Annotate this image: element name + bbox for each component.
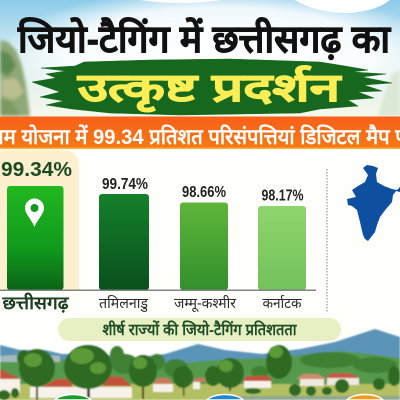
forested hill left xyxy=(0,40,30,116)
bottom circle: blue xyxy=(207,395,243,400)
mountains xyxy=(0,328,400,364)
bar: Chhattisgarh: 99.34% xyxy=(1,159,72,181)
haze band xyxy=(0,354,60,362)
bar: Tamil Nadu: 99.74% xyxy=(102,176,148,193)
highlighted heading on green brush stroke xyxy=(32,59,392,115)
header background: sky and clouds xyxy=(0,0,400,118)
landscape illustration xyxy=(0,329,400,400)
far tree line xyxy=(0,351,400,386)
label: Tamil Nadu: तमिलनाडु xyxy=(99,295,148,312)
houses xyxy=(0,369,360,398)
bar: Tamil Nadu xyxy=(99,176,149,290)
ground xyxy=(0,384,400,400)
back trees xyxy=(110,346,397,378)
bottom circle: green xyxy=(55,395,91,400)
bar chart xyxy=(0,150,316,313)
caption pill xyxy=(58,318,341,341)
bar: Jammu-Kashmir xyxy=(180,184,228,290)
highlighted heading on green brush stroke: उत्कृष्ट प्रदर्शन xyxy=(77,65,342,113)
bar: Karnataka xyxy=(258,188,306,290)
foliage highlights xyxy=(24,346,283,374)
icon: location pin xyxy=(25,198,44,227)
chart panel background xyxy=(0,149,400,344)
bar: Chhattisgarh xyxy=(1,159,72,290)
axis line xyxy=(0,290,316,291)
label: Jammu-Kashmir: जम्मू-कश्मीर xyxy=(174,295,237,312)
forested hill right xyxy=(378,70,400,116)
highlight panel: Chhattisgarh xyxy=(0,150,79,290)
front trees xyxy=(0,345,400,400)
caption pill: शीर्ष राज्यों की जियो-टैगिंग प्रतिशतता xyxy=(102,320,297,339)
bottom circle: orange xyxy=(347,395,383,400)
icon: India map xyxy=(347,165,400,241)
title: जियो-टैगिंग में छत्तीसगढ़ का xyxy=(17,17,391,61)
label: Karnataka: कर्नाटक xyxy=(262,295,302,312)
label: Chhattisgarh: छत्तीसगढ़ xyxy=(1,292,69,313)
bar: Karnataka: 98.17% xyxy=(262,188,304,204)
bar: Jammu-Kashmir: 98.66% xyxy=(182,184,226,201)
